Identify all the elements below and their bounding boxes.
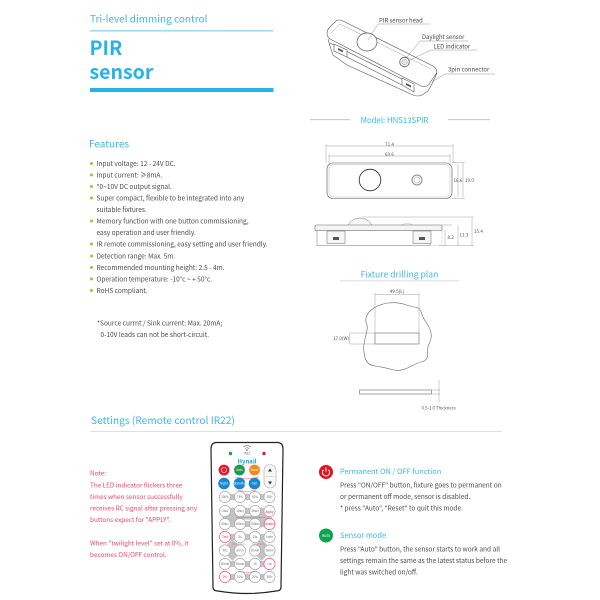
feature list: Operation temperature: -10°c ~ + 50°c. [96,274,212,284]
description: Press "ON/OFF" button, fixture goes to permanent on [340,480,502,490]
numbered button grid: 30% [266,575,273,579]
side view dimension drawing: 15.4 [474,229,483,235]
remote control IR22: Auto [236,468,243,472]
numbered button grid: 100% [221,495,229,499]
footnote [97,318,222,339]
brightness rocker [264,464,276,488]
feature list: Recommended mounting height: 2.5 - 4m. [96,262,225,272]
title: PIR [90,32,122,61]
top view dimension drawing: 69.6 [385,152,394,158]
remote control IR22: Standby [234,482,246,486]
numbered button grid: 5min [236,548,244,552]
product illustration with callouts: Daylight sensor [422,32,465,41]
note: times when sensor successfully [90,492,183,501]
numbered button grid: +∞ [267,562,272,566]
fixture outline [364,303,431,370]
description: settings remain the same as the latest status before the [340,555,508,565]
PIR sensor head [357,33,377,51]
remote control IR22 [211,442,283,594]
fixture drilling plan: 49.5(L) [390,289,405,295]
title: sensor [90,56,154,85]
sensor mode [319,528,508,576]
description: light was switched on/off. [340,566,418,576]
product illustration with callouts [327,16,495,96]
numbered button grid: 15s [253,535,258,539]
numbered button grid: 25lux [251,509,259,513]
fixture drilling plan: 17.0(W) [333,336,350,342]
icon: auto [319,528,333,542]
fixture drilling plan [333,268,459,412]
feature list [96,158,268,295]
feature list: *0~10V DC output signal. [96,181,172,191]
remote control IR22: Dim [252,482,258,486]
cutout rectangle [375,333,419,344]
description [340,480,502,512]
numbered button grid: 25% [266,495,273,499]
feature list: suitable fixtures. [96,204,147,214]
numbered button grid [219,491,275,583]
feature list: Memory function with one button commissioning, [96,216,249,226]
model heading: Model: HNS13SPIR [361,115,428,126]
footnote: *Source currnt / Sink current: Max. 20mA; [97,318,222,328]
remote indicators [229,452,232,455]
footnote: 0-10V leads can not be short-circuit. [100,329,209,339]
numbered button grid: 10min [221,562,230,566]
connector ports [334,44,414,92]
numbered button grid: 100lux [235,522,245,526]
note [90,468,198,559]
remote body [211,442,283,594]
description: or permanent off mode, sensor is disabled. [340,491,470,501]
plate thickness [360,390,432,394]
side view dimension drawing: 8.2 [448,235,454,241]
numbered button grid: 75% [237,495,243,499]
features panel [89,136,268,339]
callout lines [368,24,495,82]
numbered button grid: 30min [236,562,245,566]
note: buttons expect for "APPLY". [90,515,171,524]
pink group markers [232,477,266,573]
numbered button grid: 10min [251,548,260,552]
numbered button grid: 30min [265,548,274,552]
product illustration with callouts: 3pin connector [448,64,490,74]
numbered button grid: Test [222,535,229,539]
product illustration with callouts: LED indicator [434,42,471,50]
numbered button grid: 10lux [236,509,244,513]
icon: auto: Auto [322,533,331,539]
numbered button grid: 50% [252,495,258,499]
numbered button grid: Apply [266,510,274,514]
numbered button grid: Disable [264,522,275,526]
feature list: Input voltage: 12 - 24V DC. [96,158,176,168]
header block [90,10,274,92]
callout labels: PIR sensor head [379,16,423,24]
settings heading: Settings (Remote control IR22) [91,412,235,427]
feature list: Detection range: Max. 5m. [96,250,175,260]
numbered button grid: 50lux [221,522,229,526]
numbered button grid: 5s [238,535,242,539]
feature list: Super compact, flexible to be integrated into any [96,192,245,202]
feature list: easy operation and user friendly. [96,227,196,237]
numbered button grid: 1h [253,562,257,566]
numbered button grid: 20% [252,575,258,579]
top view dimension drawing: 16.6 [454,178,463,184]
numbered button grid: 300lux [250,522,260,526]
remote control IR22: IR22 [244,452,250,456]
feature list: IR remote commissioning, easy setting and user friendly. [96,238,268,248]
permanent on/off function [319,465,502,512]
numbered button grid: 10% [237,575,243,579]
numbered button grid: 2lux [222,509,228,513]
drilling plan heading: Fixture drilling plan [361,268,438,280]
remote control IR22: Reset [251,468,259,472]
bullet markers [90,162,93,292]
numbered button grid: 0% [223,575,227,579]
LED indicator [400,57,409,67]
numbered button grid: 90s [223,548,228,552]
note: receives RC signal after pressing any [90,504,198,512]
top view dimension drawing: 19.0 [465,178,474,184]
heading: Sensor mode [340,530,386,541]
side view dimension drawing: 11.3 [460,232,469,238]
features heading: Features [89,136,129,150]
heading: Permanent ON / OFF function [340,466,441,477]
icon: power [319,465,333,479]
colored buttons [219,465,229,475]
note: When "twilight level" set at 0%, it [90,538,189,548]
feature list: Input current: ≥8mA. [96,170,162,180]
description [340,544,508,576]
note: becomes ON/OFF control. [90,550,167,559]
description: * press "Auto", "Reset" to quit this mode. [340,502,463,512]
note: Note: [90,468,106,478]
note: The LED indicator flickers three [90,480,183,490]
grey connector shapes [222,494,272,580]
remote control IR22: Night [220,482,229,486]
top view dimension drawing [326,142,474,198]
fixture drilling plan: 0.5-1.0 Thickness [422,404,456,412]
description: Press "Auto" button, the sensor starts to work and all [340,544,500,554]
brand: Hynail [237,456,257,466]
side view dimension drawing [315,217,483,246]
top view dimension drawing: 71.4 [385,142,394,148]
feature list: RoHS compliant. [96,285,148,295]
numbered button grid: 1min [266,535,273,539]
subtitle: Tri-level dimming control [90,10,208,26]
